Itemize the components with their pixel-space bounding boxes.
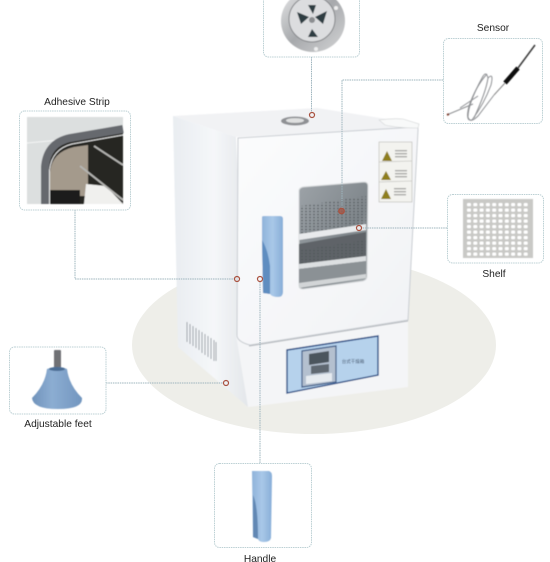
oven cabinet — [173, 108, 419, 407]
lower front body — [236, 318, 408, 407]
left side face — [173, 116, 248, 407]
sensor port cover — [379, 119, 419, 128]
panel: sensor — [444, 38, 542, 124]
label: adhesive strip: Adhesive Strip — [44, 97, 110, 108]
control panel: 台式干燥箱 — [342, 358, 365, 365]
panel: shelf — [448, 194, 544, 263]
connector lines — [75, 57, 447, 463]
connector markers — [224, 112, 362, 386]
photo: door seal — [27, 117, 123, 204]
icon: perforated shelf — [463, 199, 533, 258]
panel: handle — [214, 464, 312, 548]
window — [299, 182, 368, 289]
panel: adhesive strip — [20, 111, 130, 210]
icon: handle — [252, 471, 272, 542]
vent slots — [187, 322, 216, 361]
door handle — [262, 216, 283, 297]
door — [237, 127, 418, 345]
top vent cap — [281, 116, 309, 126]
top face — [173, 108, 418, 137]
panel: adjustable feet — [10, 347, 106, 414]
label: adjustable feet: Adjustable feet — [24, 419, 92, 430]
door lower edge shadow — [249, 321, 408, 346]
label: sensor: Sensor — [477, 23, 510, 34]
control panel — [287, 336, 378, 393]
floor ellipse — [132, 256, 496, 434]
icon: sensor probe — [447, 45, 535, 120]
warning labels — [379, 142, 412, 202]
icon: foot — [32, 350, 82, 409]
panel: top vent — [264, 0, 360, 57]
icon: vent disc — [281, 0, 345, 52]
label: shelf: Shelf — [482, 269, 506, 280]
